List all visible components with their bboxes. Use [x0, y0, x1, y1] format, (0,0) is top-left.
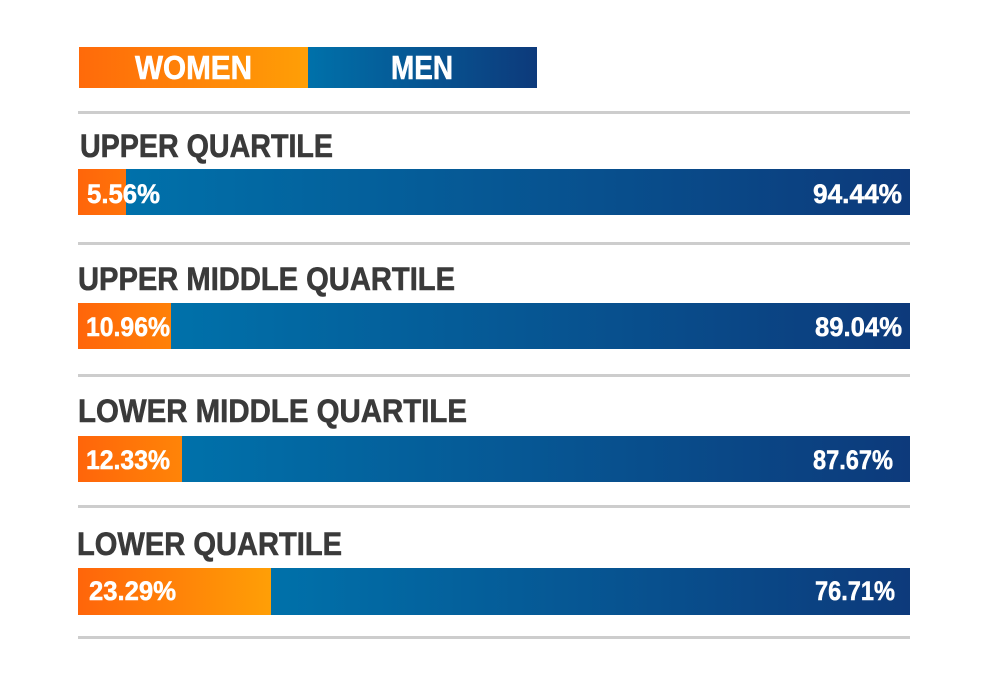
value: women 23.29%: 23.29% — [89, 576, 176, 606]
panel: upper quartile — [78, 128, 910, 215]
bar: men 76.71% — [271, 568, 910, 615]
legend: men: MEN — [391, 49, 453, 86]
bar: women 12.33% — [78, 436, 182, 482]
panel: upper middle quartile — [78, 261, 910, 349]
value: women 5.56%: 5.56% — [87, 179, 160, 209]
bar: men 87.67% — [182, 436, 910, 482]
value: men 87.67%: 87.67% — [813, 445, 893, 475]
heading: upper quartile: UPPER QUARTILE — [80, 128, 333, 164]
bar: men 89.04% — [171, 303, 910, 349]
legend: men — [308, 47, 537, 88]
legend: women — [79, 47, 308, 88]
value: men 94.44%: 94.44% — [813, 179, 902, 209]
panel: lower middle quartile — [78, 393, 910, 482]
heading: lower middle quartile: LOWER MIDDLE QUARTILE — [78, 393, 467, 429]
value: women 10.96%: 10.96% — [86, 312, 170, 342]
value: men 76.71%: 76.71% — [815, 576, 895, 606]
bar: women 10.96% — [78, 303, 171, 349]
heading: lower quartile: LOWER QUARTILE — [77, 526, 342, 562]
heading: upper middle quartile: UPPER MIDDLE QUARTILE — [78, 261, 455, 297]
bar: men 94.44% — [126, 169, 910, 215]
value: men 89.04%: 89.04% — [815, 312, 902, 342]
panel: lower quartile — [77, 526, 910, 615]
value: women 12.33%: 12.33% — [86, 445, 170, 475]
legend — [79, 47, 537, 88]
legend: women: WOMEN — [135, 49, 252, 86]
bar: women 23.29% — [78, 568, 271, 615]
bar: women 5.56% — [78, 169, 126, 215]
